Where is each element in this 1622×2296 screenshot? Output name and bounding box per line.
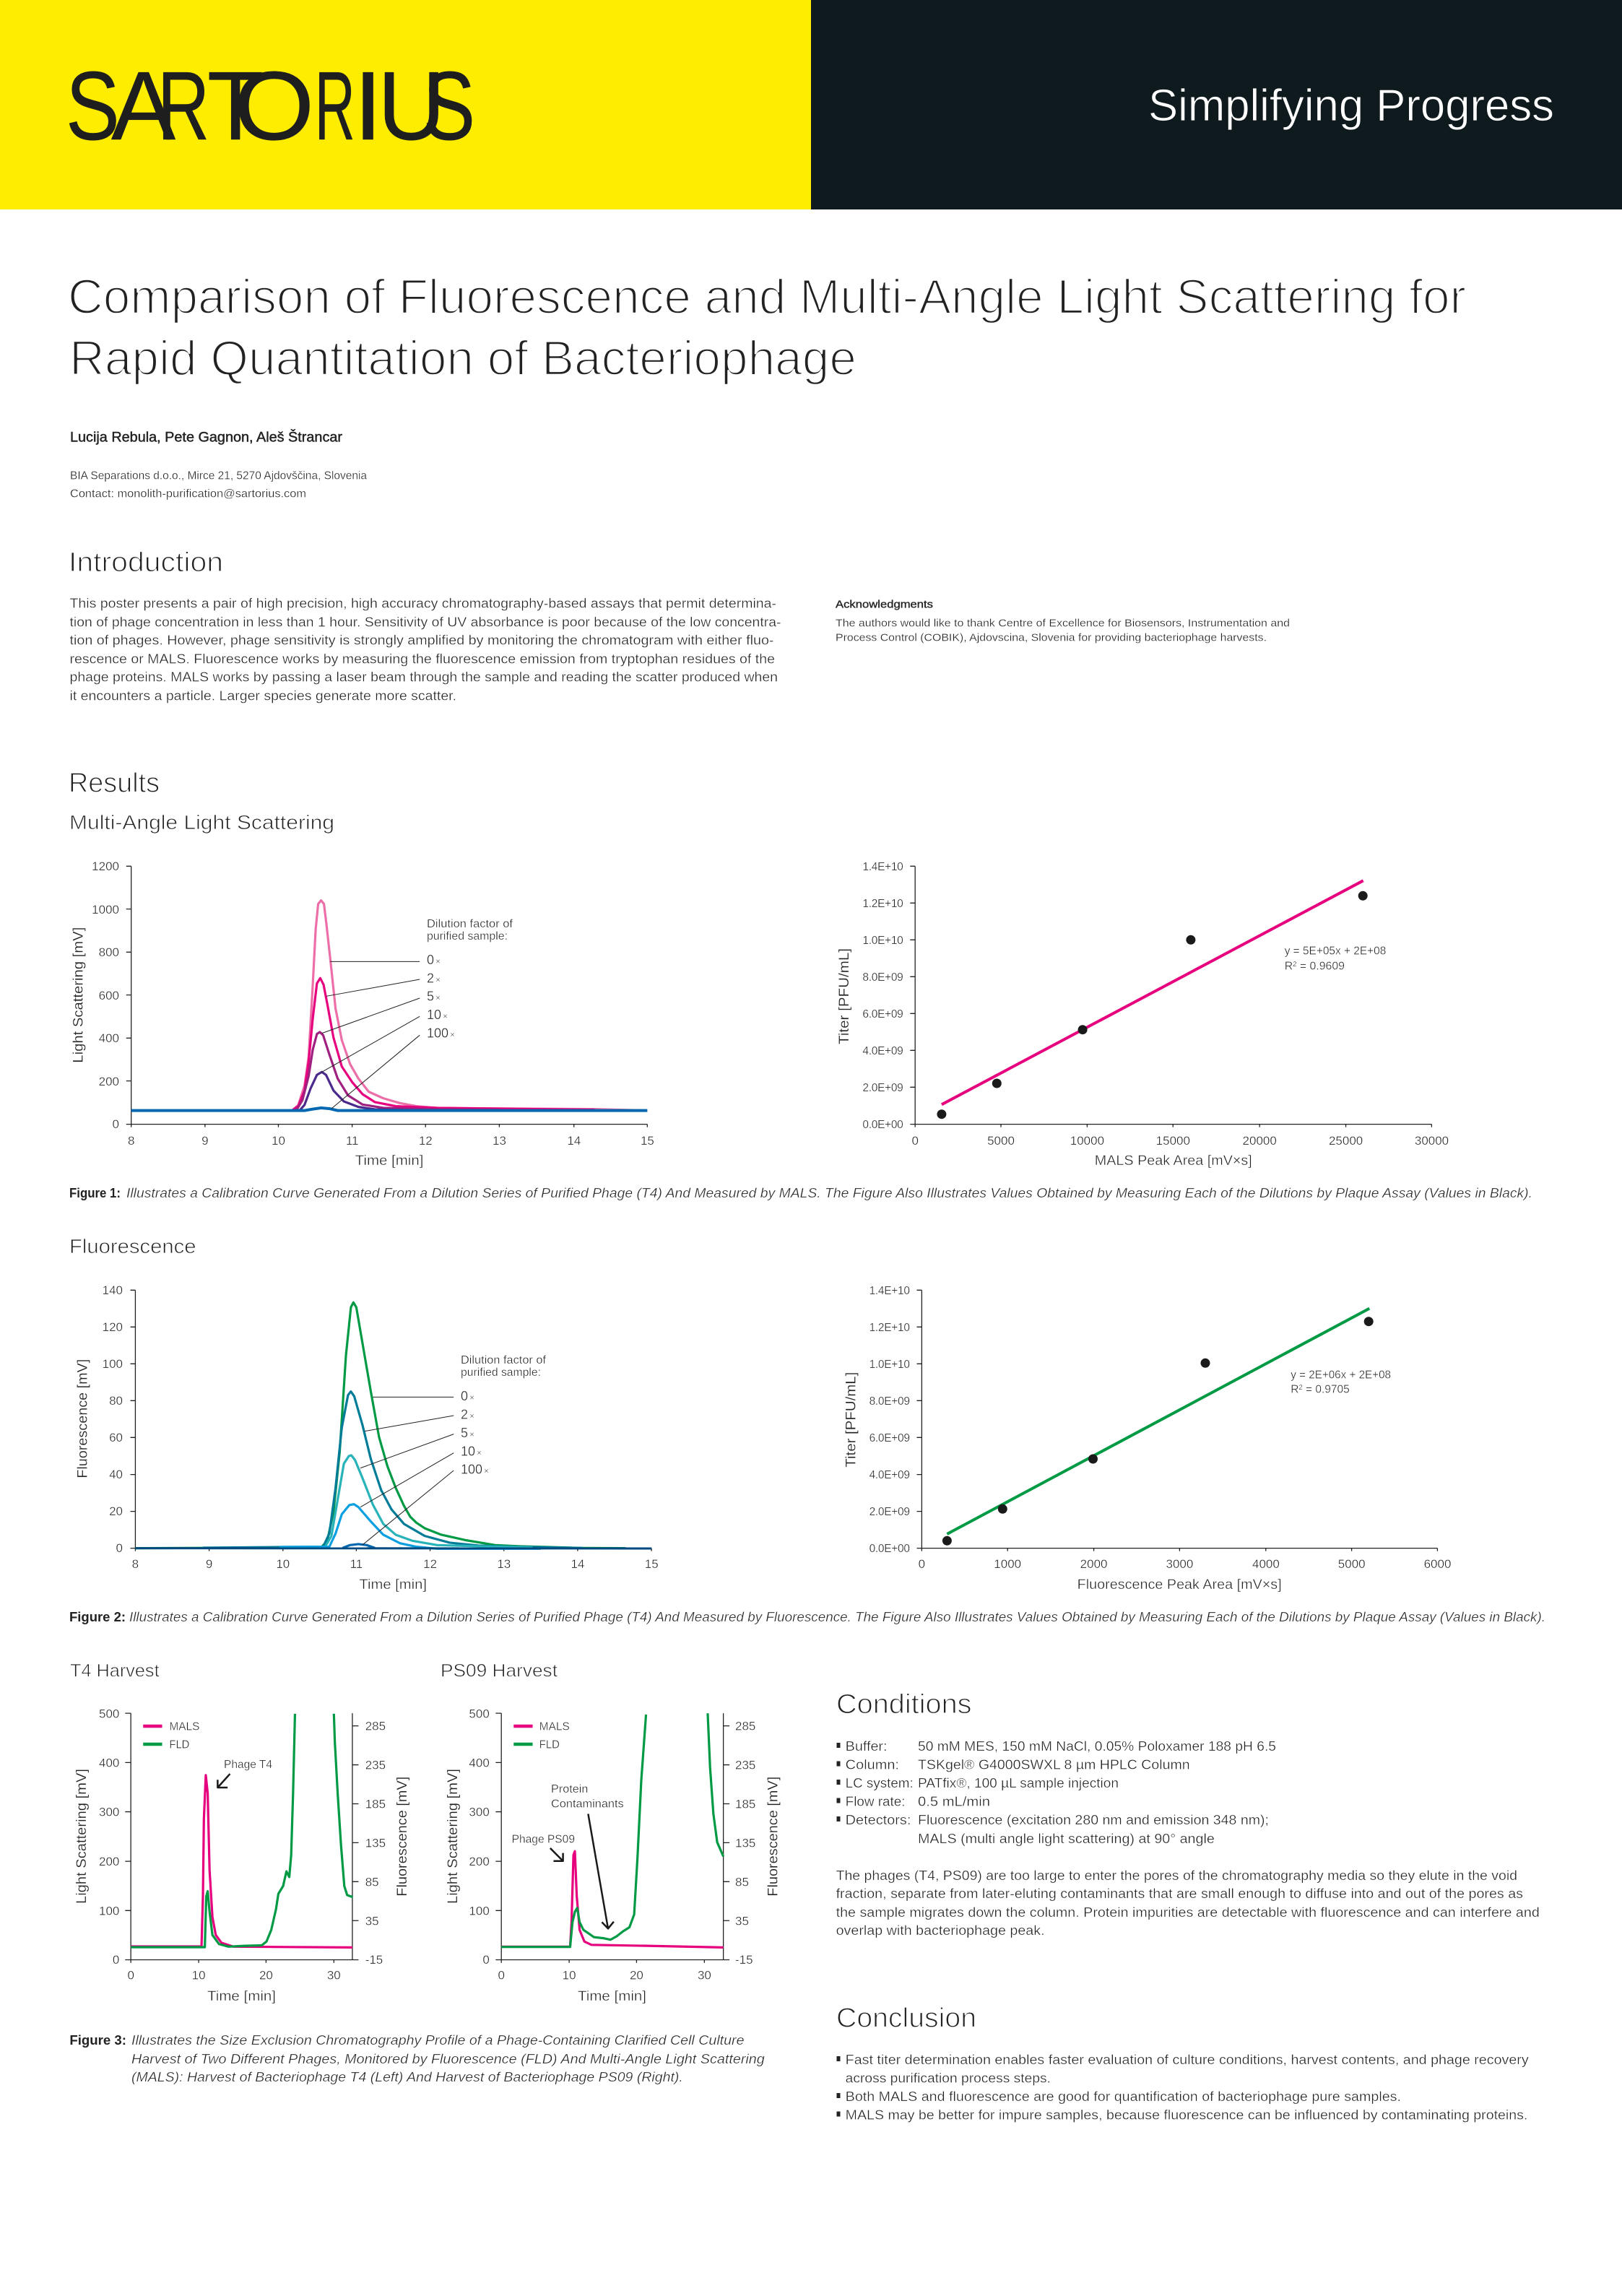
x axis title: Time [min]	[578, 1989, 646, 2004]
chart: PS09 harvest chromatogram	[446, 1707, 781, 2004]
conditions paragraph: overlap with bacteriophage peak.	[836, 1923, 1045, 1938]
y axis labels: 20	[109, 1504, 123, 1518]
figure 3 caption: Figure 3:	[69, 2033, 126, 2048]
y axis labels: 40	[109, 1468, 123, 1481]
right y axis title: Fluorescence [mV]	[766, 1777, 781, 1897]
left y axis labels: 300	[99, 1806, 119, 1819]
conclusion list	[836, 2053, 1529, 2122]
left y axis labels: 200	[99, 1855, 119, 1868]
figure 3 caption: Harvest of Two Different Phages, Monitored by Fluorescence (FLD) And Multi-Angle Light Scattering	[131, 2052, 765, 2066]
right y axis labels: 235	[365, 1758, 386, 1772]
right y axis labels: 285	[365, 1719, 386, 1733]
conclusion list: MALS may be better for impure samples, because fluorescence can be influenced by contaminating proteins.	[846, 2107, 1527, 2122]
chart: fluorescence chromatogram dilution series	[75, 1283, 659, 1593]
x axis labels	[132, 1557, 659, 1571]
logo wordmark: A	[111, 51, 176, 160]
x axis labels: 8	[128, 1134, 134, 1148]
y axis labels	[869, 1285, 910, 1555]
logo wordmark: I	[353, 52, 383, 160]
legend and annotation labels: MALS	[169, 1720, 199, 1733]
figure 3 caption: Illustrates the Size Exclusion Chromatography Profile of a Phage-Containing Clarified Cell Culture	[131, 2033, 744, 2048]
dilution legend: purified sample:	[461, 1366, 541, 1379]
y axis labels: 1.4E+10	[862, 861, 903, 873]
left y axis labels: 500	[469, 1707, 490, 1720]
x axis labels	[127, 1969, 341, 1983]
x axis labels: 30	[327, 1969, 341, 1983]
right y axis labels: 35	[365, 1914, 379, 1928]
x axis title: Fluorescence Peak Area [mV×s]	[1077, 1577, 1282, 1593]
x axis title: Time [min]	[359, 1577, 427, 1593]
x axis labels: 25000	[1329, 1134, 1363, 1148]
legend and annotation labels: FLD	[169, 1738, 189, 1751]
acknowledgments: The authors would like to thank Centre of Excellence for Biosensors, Instrumentation and	[836, 617, 1290, 629]
x axis labels: 5000	[987, 1134, 1015, 1148]
dilution legend: 5×	[427, 989, 441, 1004]
right y axis labels: 285	[735, 1719, 755, 1733]
regression equation: y = 2E+06x + 2E+08	[1291, 1369, 1391, 1381]
x axis labels: 5000	[1338, 1557, 1366, 1571]
heading: conclusion: Conclusion	[836, 2003, 976, 2034]
y axis labels: 1.0E+10	[862, 935, 903, 947]
x axis labels: 20	[630, 1969, 643, 1983]
y axis labels: 0.0E+00	[869, 1543, 910, 1555]
x axis labels	[498, 1969, 711, 1983]
y axis labels: 2.0E+09	[869, 1506, 910, 1518]
legend and annotation labels: Phage PS09	[512, 1833, 575, 1845]
logo wordmark: T	[207, 51, 264, 160]
x axis labels: 9	[201, 1134, 209, 1148]
introduction text: This poster presents a pair of high precision, high accuracy chromatography-based assays that permit determina-	[69, 597, 776, 611]
right y axis labels: 135	[735, 1836, 755, 1850]
y axis labels: 100	[103, 1357, 123, 1371]
dilution legend: Dilution factor of	[461, 1354, 547, 1366]
x axis labels	[911, 1134, 1449, 1148]
logo wordmark: R	[315, 53, 355, 160]
x axis labels: 14	[567, 1134, 581, 1148]
right y axis title: Fluorescence [mV]	[395, 1777, 410, 1897]
dilution legend: 10×	[427, 1008, 448, 1022]
affiliation and contact: BIA Separations d.o.o., Mirce 21, 5270 Ajdovščina, Slovenia	[70, 469, 367, 482]
right y axis labels	[365, 1719, 386, 1967]
x axis labels: 15	[645, 1557, 659, 1571]
regression equation: R² = 0.9609	[1285, 960, 1345, 972]
y axis labels: 6.0E+09	[869, 1432, 910, 1444]
conditions list: 0.5 mL/min	[918, 1794, 990, 1808]
conditions list: PATfix®, 100 µL sample injection	[918, 1776, 1119, 1790]
x axis labels	[128, 1134, 654, 1148]
introduction text: phage proteins. MALS works by passing a laser beam through the sample and reading the scatter produced when	[69, 670, 778, 684]
conditions list: TSKgel® G4000SWXL 8 µm HPLC Column	[918, 1757, 1190, 1772]
y axis labels: 2.0E+09	[862, 1082, 903, 1094]
x axis labels: 30000	[1415, 1134, 1449, 1148]
title	[68, 269, 1466, 386]
left y axis title: Light Scattering [mV]	[74, 1769, 90, 1904]
introduction text: tion of phages. However, phage sensitivity is strongly amplified by monitoring the chromatogram with either fluo-	[69, 633, 774, 648]
traces, axes, legend swatches and arrows	[495, 1713, 729, 1963]
acknowledgments	[836, 599, 1290, 644]
dilution legend: 5×	[461, 1426, 474, 1440]
right y axis labels: 85	[365, 1875, 379, 1889]
conclusion list: Both MALS and fluorescence are good for quantification of bacteriophage pure samples.	[846, 2089, 1401, 2104]
logo wordmark: O	[234, 52, 314, 160]
conditions list	[836, 1739, 1276, 1846]
y axis labels: 600	[99, 989, 119, 1002]
x axis labels: 4000	[1252, 1557, 1280, 1571]
figure 1 caption: Illustrates a Calibration Curve Generated From a Dilution Series of Purified Phage (T4) And Measured by MALS. The Figure Also Illustrates Values Obtained by Measuring Each of the Dilutions by Plaque Assay (Values in Black).	[126, 1186, 1532, 1200]
y axis title: Titer [PFU/mL]	[837, 948, 852, 1044]
x axis labels: 0	[127, 1969, 134, 1983]
conditions list: Flow rate:	[846, 1794, 906, 1808]
x axis labels: 20000	[1243, 1134, 1277, 1148]
plaque assay points	[942, 1317, 1374, 1546]
logo wordmark: S	[423, 51, 475, 160]
dilution legend: 2×	[461, 1407, 474, 1421]
y axis labels	[862, 861, 903, 1131]
conclusion list: across purification process steps.	[846, 2071, 1051, 2085]
legend and annotation labels: Contaminants	[551, 1798, 624, 1810]
y axis labels: 1.0E+10	[869, 1359, 910, 1371]
x axis labels: 10	[276, 1557, 290, 1571]
regression equation	[1291, 1369, 1391, 1395]
y axis labels	[92, 859, 119, 1131]
left y axis labels: 400	[99, 1756, 119, 1769]
logo wordmark	[66, 51, 475, 161]
legend and annotation labels: FLD	[539, 1738, 560, 1751]
x axis labels: 10000	[1070, 1134, 1104, 1148]
figure 1 caption: Figure 1:	[69, 1186, 121, 1200]
y axis labels	[103, 1283, 123, 1555]
y axis title: Fluorescence [mV]	[75, 1359, 90, 1478]
y axis labels: 0.0E+00	[862, 1119, 903, 1131]
plaque assay points	[937, 891, 1368, 1119]
conditions paragraph: fraction, separate from later-eluting contaminants that are small enough to diffuse into and out of the pores as	[836, 1886, 1523, 1901]
chart: fluorescence calibration scatter	[843, 1285, 1451, 1593]
y axis labels: 0	[113, 1117, 119, 1131]
x axis labels: 2000	[1080, 1557, 1108, 1571]
left y axis labels	[469, 1707, 490, 1967]
x axis labels: 14	[571, 1557, 584, 1571]
x axis labels: 10	[563, 1969, 576, 1983]
affiliation and contact	[70, 469, 367, 501]
acknowledgments: Process Control (COBIK), Ajdovscina, Slovenia for providing bacteriophage harvests.	[836, 631, 1267, 644]
right y axis labels: 185	[365, 1797, 386, 1811]
y axis labels: 6.0E+09	[862, 1008, 903, 1021]
chart: MALS calibration scatter	[837, 861, 1449, 1169]
left y axis labels: 100	[99, 1904, 119, 1918]
figure 2 caption: Figure 2:	[69, 1610, 126, 1624]
left y axis labels: 500	[99, 1707, 119, 1720]
figure 3 caption	[69, 2033, 765, 2084]
subheading: fluorescence: Fluorescence	[69, 1235, 196, 1257]
curves and axes	[126, 866, 647, 1127]
axes and trend line	[916, 1290, 1437, 1551]
x axis labels: 0	[498, 1969, 505, 1983]
dilution legend: 2×	[427, 971, 441, 985]
y axis labels: 4.0E+09	[862, 1045, 903, 1057]
acknowledgments: Acknowledgments	[836, 599, 933, 611]
logo wordmark: U	[378, 52, 446, 161]
x axis labels: 9	[206, 1557, 212, 1571]
figure 3 caption: (MALS): Harvest of Bacteriophage T4 (Left) And Harvest of Bacteriophage PS09 (Right).	[131, 2070, 683, 2084]
legend and annotation labels	[169, 1720, 272, 1771]
conditions list: Fluorescence (excitation 280 nm and emission 348 nm);	[918, 1813, 1269, 1827]
figure 2 caption: Illustrates a Calibration Curve Generated From a Dilution Series of Purified Phage (T4) And Measured by Fluorescence. The Figure Also Illustrates Values Obtained by Measuring Each of the Dilutions by Plaque Assay (Values in Black).	[129, 1610, 1545, 1624]
y axis labels: 1.2E+10	[869, 1322, 910, 1334]
introduction text: tion of phage concentration in less than 1 hour. Sensitivity of UV absorbance is poor because of the low concentra-	[69, 615, 781, 629]
x axis labels: 12	[423, 1557, 437, 1571]
conditions list: MALS (multi angle light scattering) at 90° angle	[918, 1832, 1215, 1846]
x axis labels: 20	[259, 1969, 273, 1983]
dilution legend: 100×	[427, 1026, 455, 1040]
dilution legend: 0×	[461, 1389, 474, 1403]
left y axis labels: 0	[113, 1953, 119, 1967]
y axis labels: 800	[99, 945, 119, 959]
x axis labels: 6000	[1424, 1557, 1451, 1571]
dilution legend: purified sample:	[427, 930, 508, 943]
right y axis labels: 85	[735, 1875, 749, 1889]
x axis labels: 15	[641, 1134, 654, 1148]
subheading: multi-angle light scattering: Multi-Angle Light Scattering	[69, 811, 334, 833]
x axis labels: 0	[911, 1134, 919, 1148]
right y axis labels: -15	[365, 1953, 383, 1967]
left y axis labels: 200	[469, 1855, 490, 1868]
y axis labels: 0	[116, 1541, 123, 1555]
introduction text: rescence or MALS. Fluorescence works by measuring the fluorescence emission from tryptophan residues of the	[69, 651, 775, 666]
conditions paragraph: the sample migrates down the column. Protein impurities are detectable with fluorescence and can interfere and	[836, 1905, 1540, 1920]
yellow logo panel	[0, 0, 811, 209]
y axis labels: 400	[99, 1031, 119, 1045]
heading: introduction: Introduction	[69, 547, 223, 578]
dilution legend: 0×	[427, 953, 441, 967]
logo wordmark: R	[157, 51, 209, 161]
y axis labels: 1.2E+10	[862, 898, 903, 910]
left y axis title: Light Scattering [mV]	[446, 1769, 461, 1904]
conditions paragraph: The phages (T4, PS09) are too large to enter the pores of the chromatography media so they elute in the void	[836, 1868, 1517, 1883]
dilution legend: Dilution factor of	[427, 918, 513, 930]
conditions list: LC system:	[846, 1776, 914, 1790]
x axis labels: 11	[350, 1557, 363, 1571]
dilution legend	[427, 918, 513, 1040]
header band	[0, 0, 1622, 209]
y axis labels: 1.4E+10	[869, 1285, 910, 1297]
conditions list: Buffer:	[846, 1739, 887, 1754]
heading: conditions: Conditions	[836, 1689, 972, 1720]
title: Comparison of Fluorescence and Multi-Angle Light Scattering for	[68, 269, 1466, 324]
x axis labels: 30	[698, 1969, 711, 1983]
right y axis labels: -15	[735, 1953, 753, 1967]
chart: MALS chromatogram dilution series	[71, 859, 654, 1169]
left y axis labels: 100	[469, 1904, 490, 1918]
x axis labels: 13	[497, 1557, 511, 1571]
conditions paragraph	[836, 1868, 1540, 1938]
curves and axes	[131, 1290, 651, 1551]
right y axis labels: 235	[735, 1758, 755, 1772]
x axis labels: 13	[493, 1134, 506, 1148]
right y axis labels: 135	[365, 1836, 386, 1850]
y axis labels: 4.0E+09	[869, 1469, 910, 1481]
y axis labels: 8.0E+09	[869, 1395, 910, 1408]
y axis labels: 60	[109, 1431, 123, 1444]
conclusion list: Fast titer determination enables faster evaluation of culture conditions, harvest contents, and phage recovery	[846, 2053, 1529, 2067]
y axis labels: 200	[99, 1075, 119, 1088]
legend and annotation labels	[512, 1720, 624, 1845]
y axis labels: 120	[103, 1320, 123, 1334]
dark tagline panel	[811, 0, 1622, 209]
left y axis labels: 400	[469, 1756, 490, 1769]
y axis title: Light Scattering [mV]	[71, 927, 87, 1063]
x axis labels: 12	[419, 1134, 433, 1148]
x axis labels: 3000	[1166, 1557, 1193, 1571]
subheading: PS09 harvest: PS09 Harvest	[441, 1661, 558, 1681]
x axis labels: 10	[192, 1969, 206, 1983]
regression equation: R² = 0.9705	[1291, 1383, 1350, 1395]
x axis labels	[919, 1557, 1451, 1571]
y axis title: Titer [PFU/mL]	[843, 1372, 859, 1468]
x axis labels: 8	[132, 1557, 139, 1571]
x axis labels: 1000	[994, 1557, 1021, 1571]
list bullets	[836, 2056, 841, 2116]
x axis labels: 0	[919, 1557, 925, 1571]
traces, axes, legend swatches and arrow	[125, 1713, 358, 1963]
chart: T4 harvest chromatogram	[74, 1707, 410, 2004]
x axis labels: 15000	[1156, 1134, 1190, 1148]
y axis labels: 1200	[92, 859, 119, 873]
authors: Lucija Rebula, Pete Gagnon, Aleš Štrancar	[70, 429, 343, 445]
dilution legend	[461, 1354, 547, 1476]
y axis labels: 80	[109, 1394, 123, 1408]
subheading: T4 harvest: T4 Harvest	[70, 1661, 160, 1681]
x axis title: MALS Peak Area [mV×s]	[1095, 1153, 1252, 1169]
regression equation: y = 5E+05x + 2E+08	[1285, 945, 1386, 958]
left y axis labels: 300	[469, 1806, 490, 1819]
logo wordmark: S	[66, 52, 120, 160]
legend and annotation labels: Protein	[551, 1783, 588, 1795]
right y axis labels: 35	[735, 1914, 749, 1928]
x axis title: Time [min]	[355, 1153, 423, 1169]
regression equation	[1285, 945, 1386, 972]
conditions list: Column:	[846, 1757, 899, 1772]
axes and trend line	[910, 866, 1431, 1127]
y axis labels: 1000	[92, 903, 119, 917]
x axis title: Time [min]	[207, 1989, 276, 2004]
conditions list: Detectors:	[846, 1813, 911, 1827]
tagline: Simplifying Progress	[1148, 81, 1554, 131]
title: Rapid Quantitation of Bacteriophage	[69, 331, 856, 386]
legend and annotation labels: Phage T4	[224, 1759, 272, 1771]
dilution legend: 100×	[461, 1462, 489, 1476]
introduction text: it encounters a particle. Larger species generate more scatter.	[69, 688, 456, 703]
list bullets	[836, 1743, 841, 1821]
legend and annotation labels: MALS	[539, 1720, 570, 1733]
left y axis labels: 0	[482, 1953, 490, 1967]
x axis labels: 10	[272, 1134, 285, 1148]
affiliation and contact: Contact: monolith-purification@sartorius.com	[70, 488, 306, 501]
dilution legend: 10×	[461, 1444, 482, 1459]
y axis labels: 8.0E+09	[862, 971, 903, 984]
right y axis labels	[735, 1719, 755, 1967]
conditions list: 50 mM MES, 150 mM NaCl, 0.05% Poloxamer 188 pH 6.5	[918, 1739, 1276, 1754]
left y axis labels	[99, 1707, 119, 1967]
heading: results: Results	[69, 768, 160, 799]
y axis labels: 140	[103, 1283, 123, 1297]
right y axis labels: 185	[735, 1797, 755, 1811]
introduction text	[69, 597, 781, 703]
x axis labels: 11	[346, 1134, 359, 1148]
